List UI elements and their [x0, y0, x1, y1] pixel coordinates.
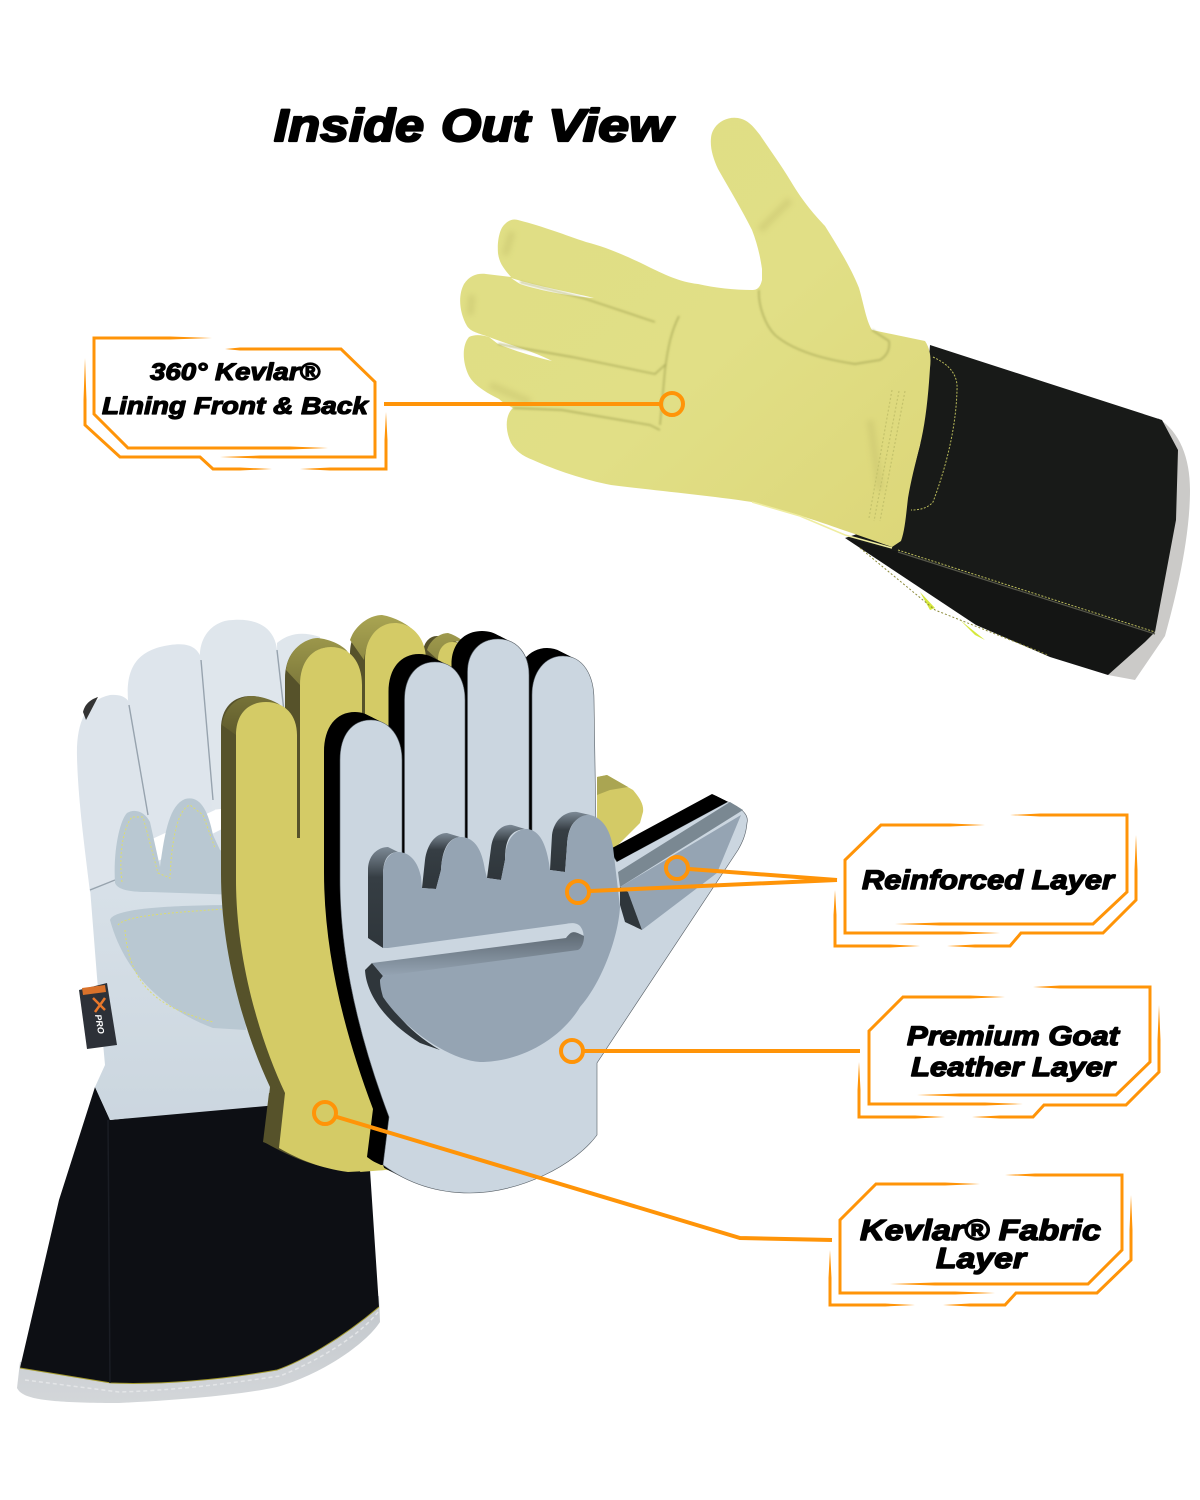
leader line: goat leather [561, 1040, 860, 1062]
leather bottom corner cover [360, 1158, 385, 1172]
slot bevel [372, 932, 584, 976]
top glove: inside out Kevlar view [460, 118, 1190, 680]
upper piece sides [368, 812, 590, 948]
palm grey patch lower [110, 905, 246, 1030]
flap stitch [860, 548, 1048, 655]
title: View [548, 100, 676, 151]
title: Out [441, 100, 532, 151]
patch stitching [118, 805, 240, 1022]
callout text: Reinforced Layer [862, 865, 1116, 895]
thumb light strip [615, 802, 732, 872]
glove cuff binding [17, 1296, 380, 1403]
soft finger shadows [470, 200, 880, 490]
ring finger [128, 644, 215, 840]
index finger [277, 634, 320, 800]
leader lines: reinforced layer [567, 857, 837, 903]
Kevlar thumb tip [597, 775, 643, 850]
reinforced layer: palm [365, 812, 620, 1062]
cuff frayed edge [752, 502, 892, 548]
leader line: Kevlar lining [384, 393, 683, 415]
palm grey patch upper [115, 798, 240, 895]
finger creases [90, 650, 285, 890]
leader line: Kevlar fabric [314, 1102, 832, 1240]
pinky finger [77, 695, 155, 892]
flap fold line [898, 552, 1155, 634]
thumb dark band [618, 802, 743, 887]
Kevlar thumb extrusion [597, 775, 628, 795]
gaps between fingers [489, 278, 594, 361]
pinky tip dark [83, 697, 98, 720]
callout: reinforced layer [834, 814, 1138, 948]
callout text: Kevlar® Fabric [860, 1215, 1101, 1247]
glove back cuff flap [845, 538, 1155, 675]
callout text: 360° Kevlar® [150, 359, 320, 386]
callout text: Premium Goat [907, 1021, 1120, 1051]
lining seams [498, 282, 889, 430]
callout text line 2: Lining Front & Back [102, 393, 370, 420]
black cuff [845, 345, 1178, 632]
neon fragment [920, 592, 985, 640]
title [274, 100, 676, 151]
thumb reinforced side [620, 887, 642, 930]
cuff stitching [898, 357, 1155, 632]
callout: 360 Kevlar lining [84, 336, 388, 470]
reinforced layer: thumb [615, 802, 743, 930]
glove black cuff [20, 1087, 379, 1383]
lower piece side [365, 963, 440, 1050]
extrusion finger caps [222, 615, 467, 735]
bottom full leather glove [17, 620, 380, 1403]
callout: Kevlar fabric layer [828, 1174, 1132, 1306]
knit hem stitching [869, 390, 905, 521]
cuff seam [108, 1120, 110, 1383]
extrusion bottom corner [263, 1093, 285, 1148]
cuff binding [1100, 418, 1190, 680]
exploded layer: Kevlar fabric [221, 615, 643, 1172]
brand tag [79, 983, 117, 1049]
brand tag: PRO [93, 1014, 106, 1035]
Kevlar face [236, 623, 500, 1172]
leather palm [90, 780, 320, 1120]
middle finger [200, 620, 295, 810]
callout text line 2: Layer [936, 1243, 1028, 1275]
Kevlar layer extrusion [221, 617, 497, 1171]
reinforced face [380, 815, 620, 1062]
callout text line 2: Leather Layer [911, 1052, 1117, 1082]
leather face [340, 639, 747, 1193]
black extrusion [324, 631, 743, 1191]
title: Inside [274, 100, 424, 151]
callout: premium goat leather [858, 986, 1160, 1118]
binding stitching [25, 1312, 378, 1392]
thumb reinforced face [620, 815, 741, 930]
Kevlar lining body [460, 118, 930, 547]
cuff yellow edge [20, 1307, 379, 1383]
exploded layer: goat leather [324, 631, 747, 1193]
